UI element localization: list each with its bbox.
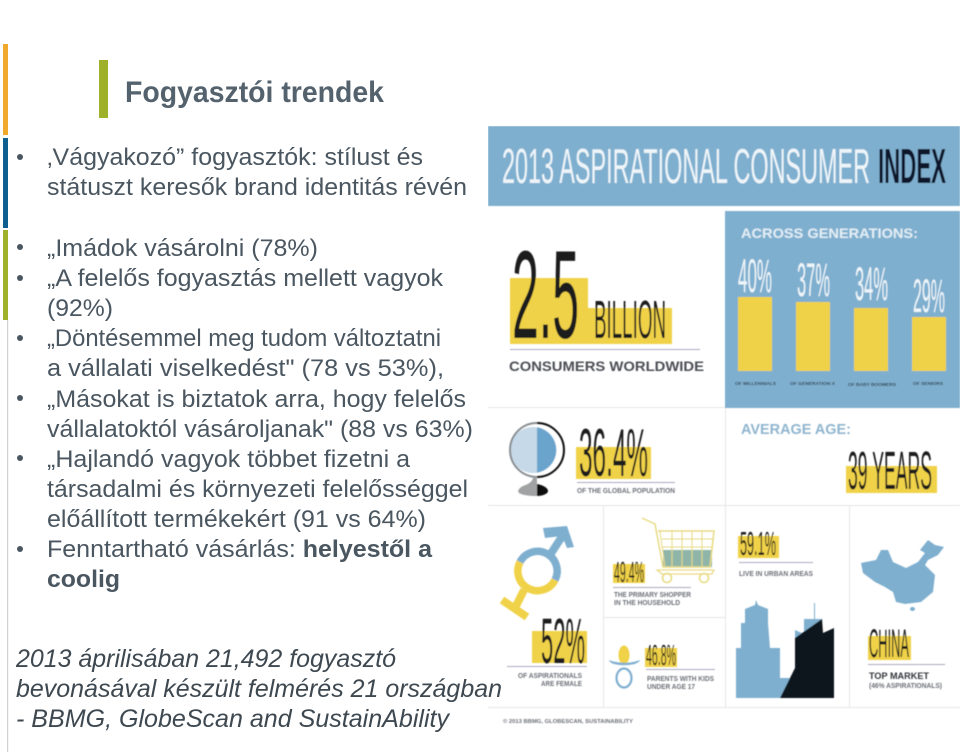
- stat: 49.4% primary shopper: IN THE HOUSEHOLD: [614, 600, 680, 607]
- stat: 49.4% primary shopper: 49.4%: [614, 557, 644, 589]
- stat: 2.5 billion consumers: BILLION: [594, 290, 666, 350]
- infographic: 2013 Aspirational Consumer Index: [488, 126, 960, 725]
- stat: 46.8% parents: [645, 640, 715, 691]
- panel grid lines: [488, 405, 960, 708]
- bullet list: a vállalati viselkedést" (78 vs 53%),: [47, 355, 444, 382]
- decorative side bars: [3, 44, 8, 752]
- infographic: 2013 Aspirational Consumer Index: 36.4%: [579, 415, 648, 491]
- stat: 46.8% parents: PARENTS WITH KIDS: [647, 676, 714, 683]
- bullet list: státuszt keresők brand identitás révén: [47, 174, 467, 201]
- panel: across generations bar chart: OF MILLENNIALS: [735, 381, 776, 386]
- bullet list: előállított termékekért (91 vs 64%): [47, 506, 426, 533]
- panel: across generations bar chart: 34%: [855, 257, 888, 310]
- stat: 46.8% parents: 46.8%: [646, 640, 676, 672]
- panel: across generations bar chart: 40%: [738, 249, 772, 302]
- bullet list: coolig: [47, 566, 120, 593]
- stat: 52% female: OF ASPIRATIONALS: [518, 673, 582, 680]
- title: Fogyasztói trendek: [125, 76, 384, 109]
- stat: 59.1% urban: 59.1%: [740, 525, 776, 562]
- panel: across generations bar chart: [725, 211, 960, 407]
- stat: 59.1% urban: [738, 525, 813, 578]
- infographic: 2013 Aspirational Consumer Index: 52%: [541, 605, 585, 677]
- bullet list: „Imádok vásárolni (78%): [47, 235, 318, 262]
- bullet list: „Másokat is biztatok arra, hogy felelős: [47, 386, 466, 413]
- header band: [488, 126, 960, 206]
- stat: China top market: (46% ASPIRATIONALS): [869, 683, 942, 690]
- icon: pacifier: [610, 646, 639, 688]
- source note: - BBMG, GlobeScan and SustainAbility: [16, 705, 450, 733]
- stat: 2.5 billion consumers: CONSUMERS WORLDWIDE: [509, 358, 704, 374]
- stat: 49.4% primary shopper: THE PRIMARY SHOPPER: [614, 592, 691, 599]
- heading accent bar: [99, 60, 108, 118]
- source note: [15, 645, 502, 733]
- stat: average age: AVERAGE AGE:: [741, 421, 851, 438]
- source note: 2013 áprilisában 21,492 fogyasztó: [15, 645, 396, 673]
- stat: 2.5 billion consumers: 2.5: [512, 226, 579, 365]
- panel: across generations bar chart: ACROSS GENERATIONS:: [741, 225, 918, 241]
- bullet list: (92%): [47, 295, 113, 322]
- source note: bevonásával készült felmérés 21 országban: [16, 675, 502, 703]
- bullet list: ‚Vágyakozó” fogyasztók: stílust és: [47, 144, 423, 171]
- bullet list: „Hajlandó vagyok többet fizetni a: [47, 446, 411, 473]
- icon: gender symbol: [502, 526, 574, 617]
- panel: across generations bar chart: 37%: [797, 253, 830, 306]
- bullet list: [17, 144, 473, 593]
- panel: across generations bar chart: OF SENIORS: [913, 381, 943, 386]
- icon: globe: [510, 423, 564, 496]
- stat: 46.8% parents: UNDER AGE 17: [647, 684, 695, 691]
- icon: shopping cart: [642, 518, 714, 582]
- stat: 52% female: [507, 605, 587, 688]
- stat: 36.4%: [576, 415, 675, 495]
- bullet list: „Döntésemmel meg tudom változtatni: [47, 325, 441, 352]
- stat: average age: [741, 421, 937, 501]
- stat: 59.1% urban: LIVE IN URBAN AREAS: [739, 571, 813, 578]
- icon: city skyline: [736, 600, 834, 698]
- panel: across generations bar chart: OF GENERATION X: [790, 381, 835, 386]
- stat: China top market: TOP MARKET: [869, 671, 929, 681]
- stat: 52% female: ARE FEMALE: [541, 681, 582, 688]
- panel: across generations bar chart: OF BABY BOOMERS: [848, 382, 896, 387]
- footer credit: © 2013 BBMG, GLOBESCAN, SUSTAINABILITY: [503, 718, 633, 725]
- stat: 36.4%: OF THE GLOBAL POPULATION: [577, 488, 675, 495]
- stat: 49.4% primary shopper: [613, 557, 691, 607]
- bullet list: Fenntartható vásárlás: helyestől a: [47, 536, 433, 563]
- icon: China map: [861, 540, 944, 611]
- bullet list: társadalmi és környezeti felelősséggel: [47, 476, 468, 503]
- bullet list: „A felelős fogyasztás mellett vagyok: [47, 265, 444, 292]
- stat: China top market: [868, 622, 945, 690]
- bullet list: vállalatoktól vásároljanak" (88 vs 63%): [47, 416, 473, 443]
